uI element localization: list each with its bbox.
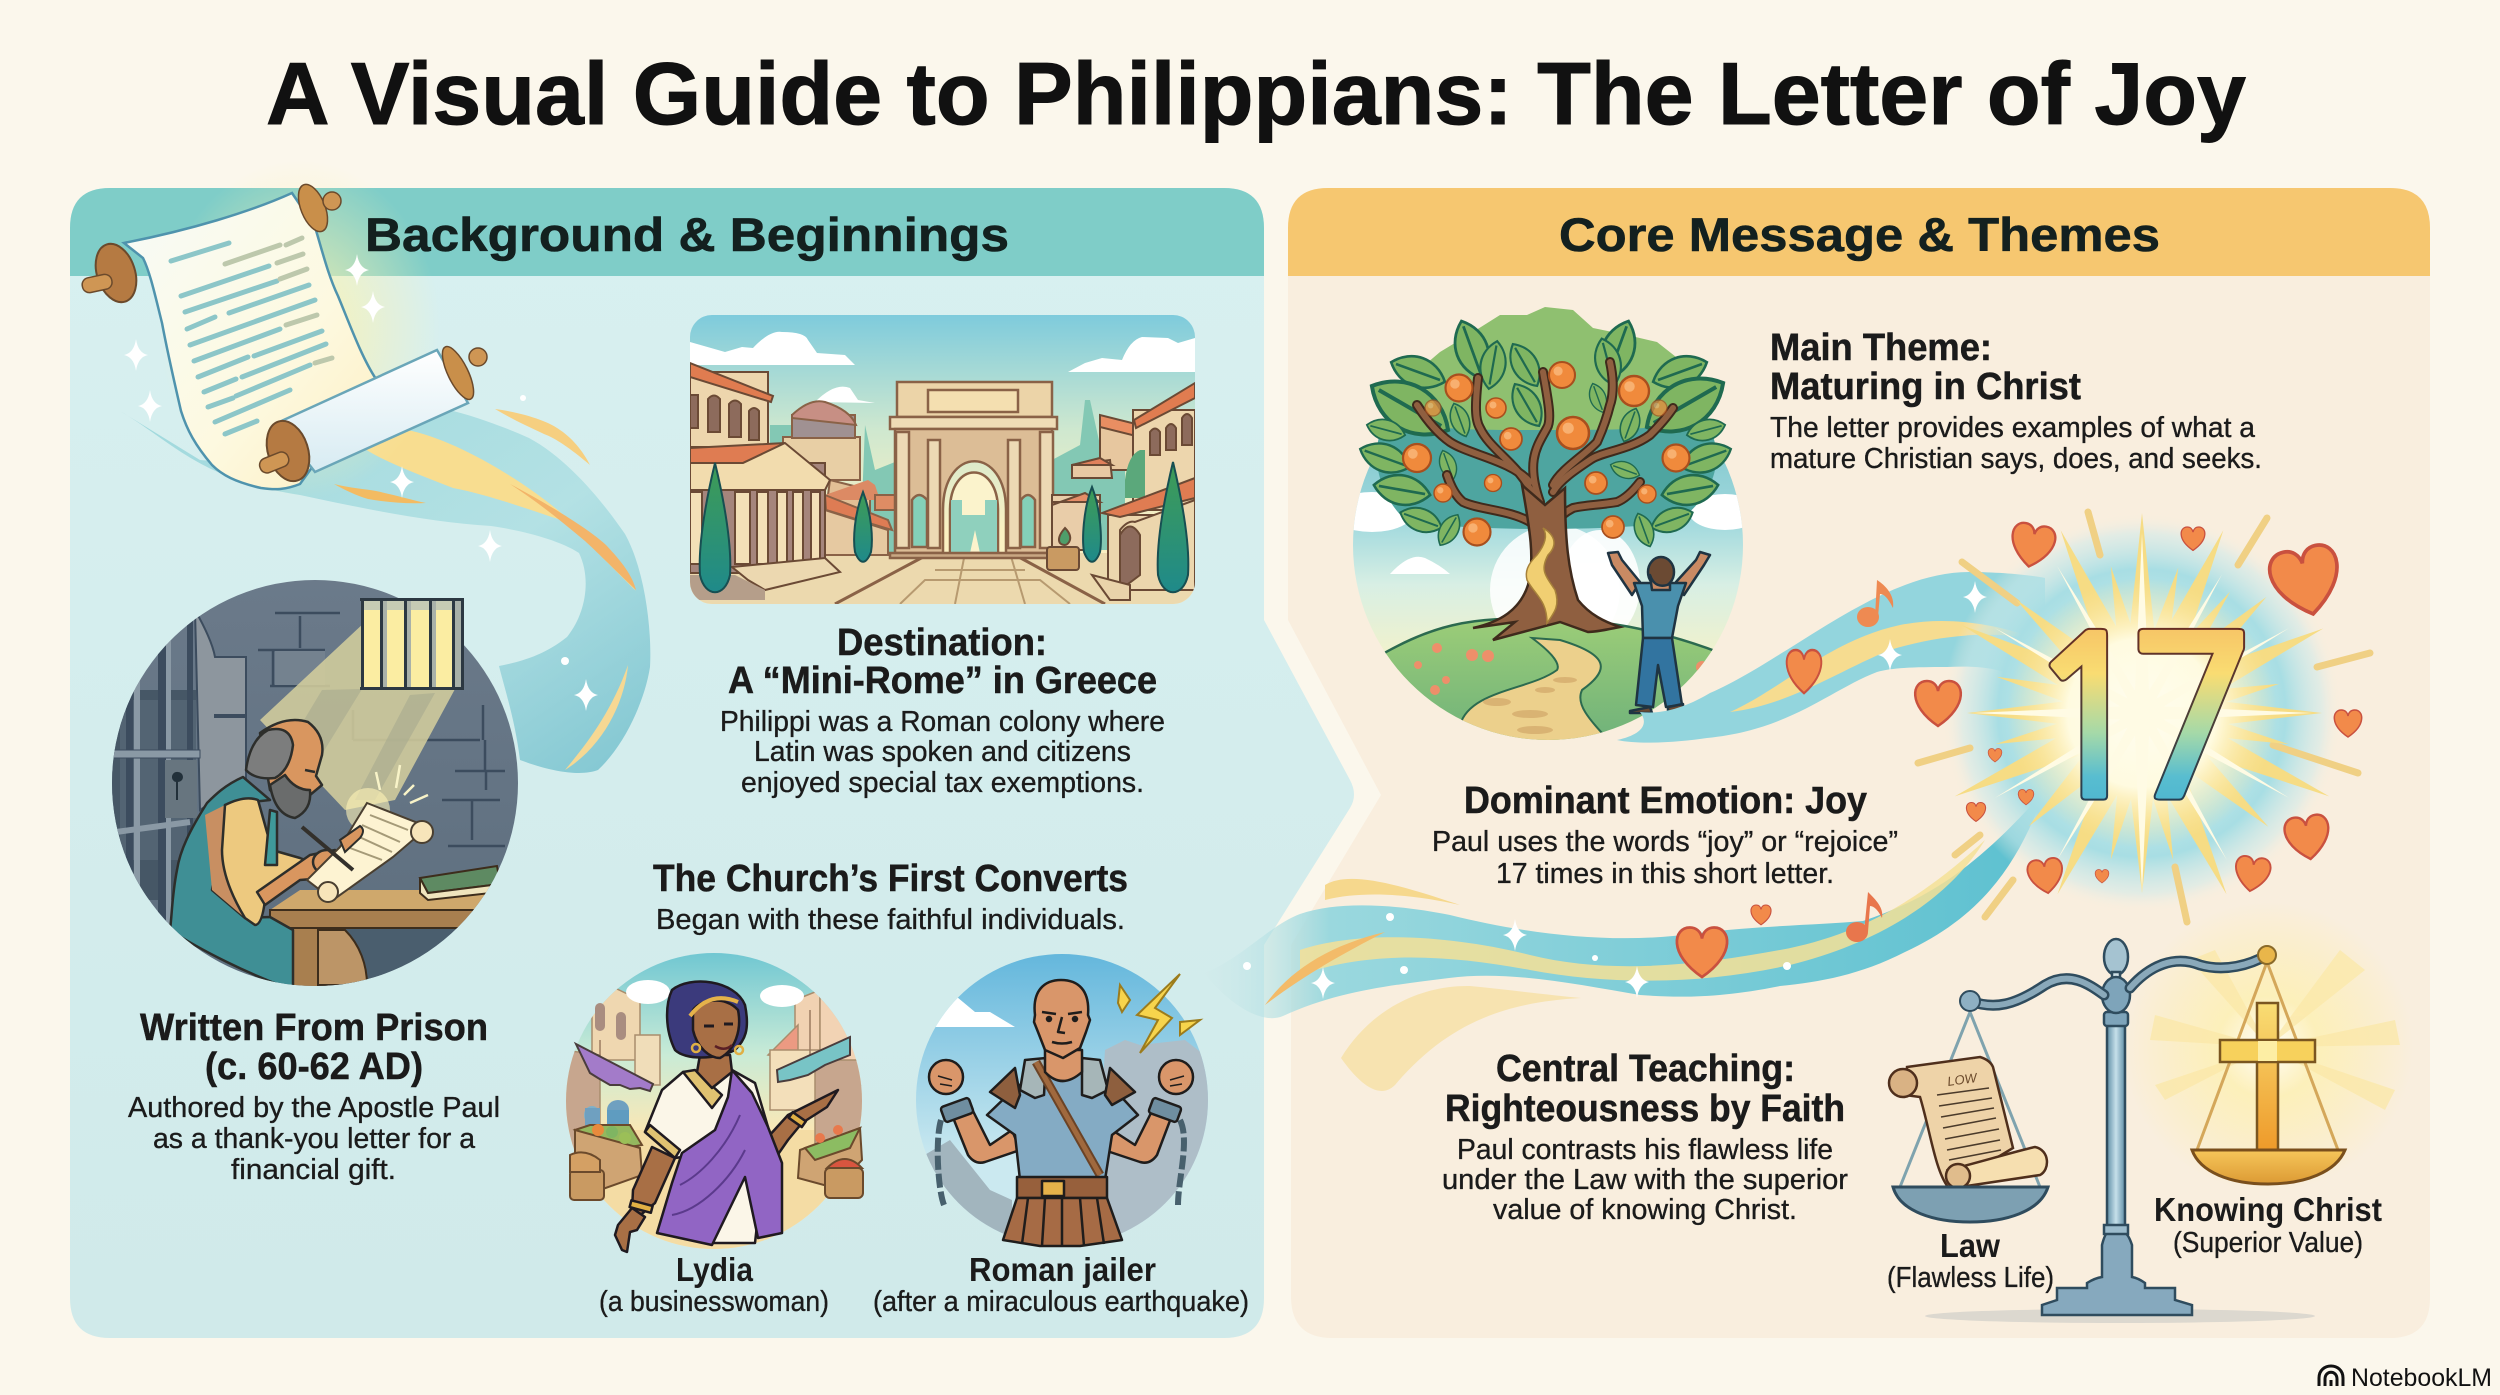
right buildings: [1047, 383, 1195, 600]
text block: dominant emotion: Paul uses the words “joy” or “rejoice”: [1432, 826, 1898, 858]
left building: [690, 363, 773, 447]
text block: destination: [720, 622, 1165, 799]
panel header: core message: [1288, 188, 2430, 276]
leaves: [1356, 316, 1735, 550]
text block: main theme: Main Theme:: [1770, 327, 1992, 369]
stone pillar: [195, 610, 246, 810]
light rays: [1946, 513, 2338, 903]
illustration: balance scale: [1889, 902, 2413, 1323]
text block: central teaching: Central Teaching:: [1496, 1048, 1795, 1090]
panel: core message and themes: [1288, 188, 2430, 1338]
Paul figure: [170, 720, 342, 990]
branches: [1417, 362, 1673, 525]
caption: knowing Christ: (Superior Value): [2173, 1227, 2363, 1259]
text block: first converts: The Church’s First Converts: [653, 858, 1128, 900]
title: A Visual Guide to Philippians: The Letter of Joy: [266, 44, 2246, 143]
winding path: [1461, 636, 1603, 740]
hearts and music notes: [1677, 521, 2362, 977]
scale post: [2042, 939, 2192, 1315]
person with raised arms: [1608, 552, 1710, 713]
cypress trees: [700, 462, 1188, 592]
text block: written from prison: (c. 60-62 AD): [205, 1046, 423, 1088]
triumphal arch: [890, 382, 1060, 558]
text block: first converts: Began with these faithful individuals.: [656, 904, 1125, 936]
text block: central teaching: Paul contrasts his flawless life: [1457, 1134, 1833, 1166]
jail door bars: [110, 620, 200, 940]
cross: [2220, 1003, 2315, 1150]
space beneath desk: [320, 927, 458, 986]
lightning bolt: [1118, 974, 1200, 1053]
trunk: [1473, 485, 1620, 640]
text block: first converts: [653, 858, 1128, 936]
text block: written from prison: Written From Prison: [140, 1007, 488, 1049]
flowers on hill: [1414, 643, 1708, 695]
text block: main theme: Maturing in Christ: [1770, 366, 2081, 408]
caption: law: Law: [1940, 1227, 2000, 1264]
caption: Lydia: Lydia: [676, 1251, 754, 1288]
icon group: Lydia portrait: [563, 950, 868, 1252]
caption: Roman jailer: (after a miraculous earthquake): [873, 1286, 1249, 1318]
left pan: [1893, 1187, 2048, 1222]
caption: law: (Flawless Life): [1887, 1262, 2054, 1294]
text block: destination: A “Mini-Rome” in Greece: [728, 660, 1157, 702]
cross glow: [2123, 902, 2413, 1192]
illustration: Roman city of Philippi: [690, 315, 1195, 604]
scale beam: [1970, 955, 2267, 1005]
caption: Roman jailer: Roman jailer: [969, 1251, 1156, 1288]
road and ground: [690, 553, 1195, 604]
number 17: 1: [2022, 612, 2157, 832]
music note upper: [1857, 580, 1893, 627]
panel header: background: [70, 188, 1264, 276]
market buildings: [566, 988, 862, 1149]
caption: law: [1887, 1227, 2054, 1294]
illustration: Paul writing in prison: [110, 578, 530, 997]
text block: main theme: mature Christian says, does, and seeks.: [1770, 443, 2262, 475]
text block: central teaching: under the Law with the superior: [1442, 1164, 1848, 1196]
text block: destination: Destination:: [837, 622, 1047, 664]
market stalls: [570, 1100, 863, 1200]
broken chains: [938, 1120, 1184, 1205]
law scroll: LOW: [1946, 1070, 1979, 1089]
caption: Lydia: (a businesswoman): [599, 1286, 829, 1318]
text block: central teaching: Righteousness by Faith: [1445, 1088, 1845, 1130]
outer sticks: [1918, 512, 2370, 922]
heading: core message and themes: Core Message & Themes: [1559, 208, 2160, 261]
text block: main theme: [1770, 327, 2262, 475]
apples: [1403, 362, 1690, 546]
text block: dominant emotion: 17 times in this short letter.: [1496, 858, 1834, 890]
writing desk: [269, 864, 498, 986]
burst: number 17: [1918, 512, 2370, 922]
clouds: [690, 332, 1195, 403]
flow ribbon: joy wave lower: [1204, 790, 2045, 1091]
text block: dominant emotion: [1432, 780, 1898, 890]
text block: main theme: The letter provides examples of what a: [1770, 412, 2256, 444]
number 17: 7: [2125, 612, 2260, 832]
jailer figure: [929, 980, 1193, 1246]
window light beam: [260, 608, 455, 810]
text block: written from prison: as a thank-you letter for a: [153, 1123, 476, 1155]
left buildings behind temple: [783, 401, 895, 555]
scroll text lines: [171, 238, 332, 434]
text block: destination: Philippi was a Roman colony where: [720, 706, 1165, 738]
white inner rays: [1972, 533, 2312, 893]
text block: destination: Latin was spoken and citizens: [754, 736, 1131, 768]
distant hills: [770, 400, 1125, 555]
text block: central teaching: [1442, 1048, 1848, 1226]
scroll rollers: [81, 180, 487, 487]
icon: flying scroll: [81, 160, 487, 500]
caption: knowing Christ: Knowing Christ: [2154, 1191, 2382, 1228]
caption: knowing Christ: [2154, 1191, 2382, 1259]
right pan strings: [2197, 962, 2338, 1150]
music note lower: [1846, 892, 1882, 942]
left pan strings: [1900, 1012, 2040, 1187]
text block: dominant emotion: Dominant Emotion: Joy: [1464, 780, 1867, 822]
flow ribbon: joy wave upper: [1617, 572, 2045, 743]
temple: [690, 443, 840, 600]
letter paper: [302, 765, 433, 902]
Lydia figure: [615, 982, 838, 1252]
barred window: [360, 598, 464, 690]
heading: background and beginnings: Background & Beginnings: [365, 208, 1009, 261]
prison wall bricks: [258, 613, 505, 846]
illustration: fruit tree and rejoicing person: [1353, 307, 1743, 740]
canopy: [1356, 307, 1735, 640]
right pan: [2192, 1150, 2345, 1184]
caption: Lydia: [599, 1251, 829, 1318]
panel: background and beginnings: [70, 188, 1354, 1338]
flow ribbon: scroll to prison: [120, 395, 650, 773]
text block: central teaching: value of knowing Christ.: [1493, 1194, 1797, 1226]
text block: written from prison: financial gift.: [231, 1154, 396, 1186]
law scroll: [1889, 1057, 2047, 1188]
text block: written from prison: Authored by the Apostle Paul: [128, 1092, 500, 1124]
text block: written from prison: [128, 1007, 500, 1186]
windows and awnings: [576, 1003, 850, 1091]
scale shadow: [1925, 1309, 2315, 1323]
hill: [1384, 618, 1713, 740]
NotebookLM mark: NotebookLM: [2351, 1364, 2492, 1392]
icon group: Roman jailer portrait: [916, 950, 1211, 1250]
text block: destination: enjoyed special tax exemptions.: [741, 767, 1144, 799]
caption: Roman jailer: [873, 1251, 1249, 1318]
